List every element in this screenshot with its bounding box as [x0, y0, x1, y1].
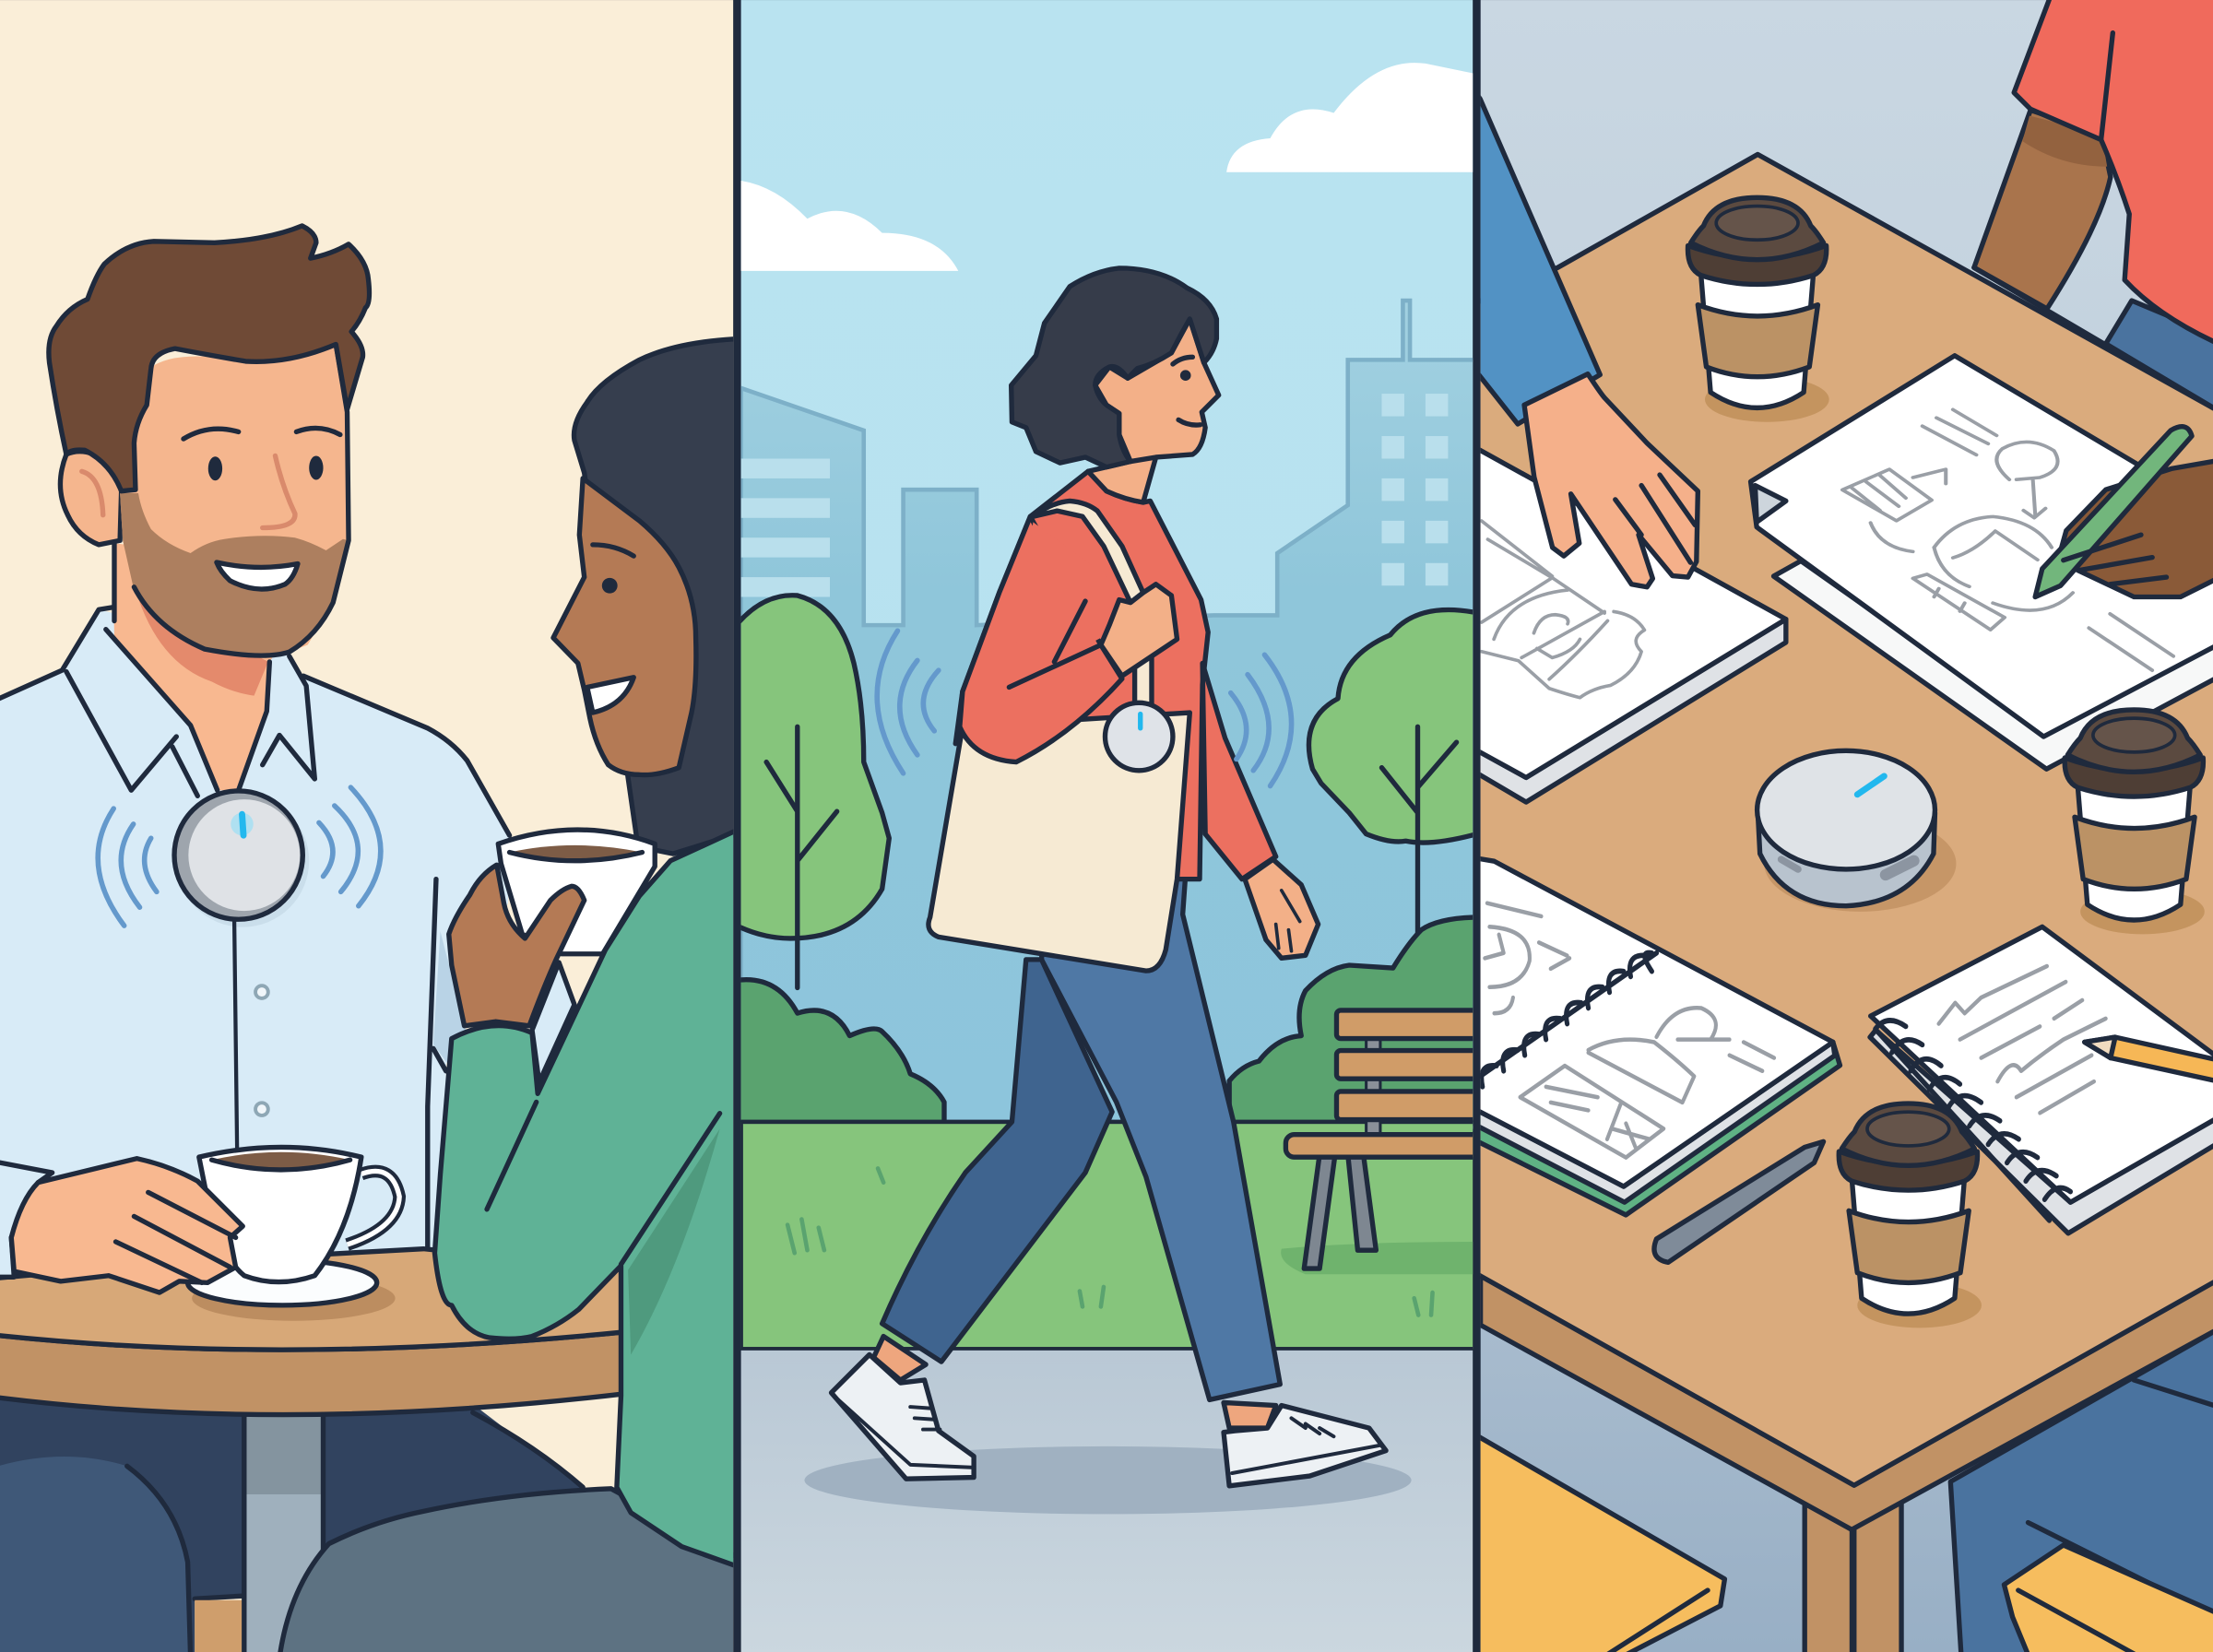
city buildings: [741, 301, 1479, 1129]
cup right: [2065, 710, 2205, 934]
table edge: [0, 1332, 624, 1415]
sound waves left: [98, 808, 157, 926]
bush right: [1229, 917, 1482, 1123]
drawing hand: [2035, 427, 2213, 597]
woman's smile: [1178, 419, 1201, 425]
neck and collar lines: [66, 540, 314, 796]
chair right: [2004, 1545, 2213, 1652]
bush left: [734, 980, 944, 1123]
arm shadow: [433, 931, 466, 1066]
man's nose: [263, 455, 295, 528]
woman's hair: [574, 338, 741, 854]
person's legs right: [1950, 1327, 2213, 1652]
person top right arm: [1974, 110, 2111, 309]
tree left: [734, 596, 889, 987]
small device on bag: [1105, 702, 1173, 771]
woman's face: [1095, 319, 1219, 462]
woman's eye: [1180, 370, 1191, 381]
person top right shirt: [2014, 0, 2213, 346]
man's smile: [217, 562, 298, 589]
man's eyebrows: [183, 428, 340, 439]
woman's coffee cup: [498, 830, 655, 954]
grass tufts: [787, 1168, 1433, 1316]
grass: [741, 1122, 1478, 1349]
man's eyes: [208, 455, 324, 480]
man's hand: [11, 1159, 243, 1292]
cup bottom: [1839, 1103, 1982, 1328]
cloud right: [1226, 63, 1473, 172]
road: [741, 1351, 1473, 1652]
wearable device on man: [174, 791, 309, 927]
table top: [0, 1249, 628, 1350]
woman's walking hand: [1245, 859, 1319, 958]
woman's hand: [449, 865, 585, 1026]
man's coffee cup: [199, 1147, 399, 1282]
front leg: [1042, 875, 1280, 1399]
man's shirt placket and buttons: [234, 920, 268, 1150]
ground shadow: [804, 1446, 1412, 1514]
notebook upper left: [1474, 447, 1786, 802]
man's shirt: [0, 609, 510, 1256]
man's face: [120, 345, 349, 655]
knee outline: [127, 1466, 191, 1652]
table foot block: [195, 1600, 243, 1652]
sketch paper back: [1774, 560, 2213, 769]
bench: [1281, 1010, 1485, 1274]
smart speaker device: [1757, 750, 1956, 912]
upper bag strap: [1033, 501, 1143, 603]
legs outline: [195, 1412, 583, 1599]
building windows left: [741, 459, 830, 597]
back leg: [882, 960, 1112, 1362]
hand gripping strap: [1101, 584, 1178, 676]
back shoe: [832, 1354, 974, 1479]
notebook lower right: [1870, 926, 2213, 1233]
chair left: [1473, 1434, 1724, 1652]
man's legs under table: [0, 1390, 586, 1652]
sketch paper front: [1751, 356, 2213, 737]
saucer: [188, 1260, 377, 1305]
woman's face: [553, 478, 696, 775]
face outline: [134, 345, 349, 655]
woman's lower body: [279, 1489, 741, 1652]
far arm sleeve: [1202, 663, 1276, 879]
woman's eyebrow: [593, 545, 633, 556]
table shadow of saucer: [192, 1286, 395, 1321]
front shoe: [1224, 1406, 1386, 1486]
shirt gap near woman's arm: [532, 962, 574, 1082]
sweater folds: [487, 1102, 720, 1264]
sound waves right: [1231, 655, 1292, 786]
notebook lower left: [1474, 858, 1840, 1215]
tree right: [1308, 609, 1482, 946]
man's beard: [120, 493, 349, 655]
table top: [1474, 155, 2213, 1485]
sky: [741, 0, 1473, 1129]
cream gap below cup: [562, 959, 599, 999]
table edge: [1481, 1276, 2213, 1529]
woman's eye: [602, 578, 618, 594]
table leg: [244, 1397, 324, 1652]
woman's neck: [1088, 431, 1156, 502]
coral sweater: [955, 471, 1208, 879]
front ankle: [1224, 1402, 1276, 1428]
panel: park walk: [734, 0, 1485, 1652]
woman's hair: [1012, 268, 1216, 467]
arm fill over torso: [1011, 522, 1129, 686]
panel: table top collaboration: [1473, 0, 2213, 1652]
person top right jeans: [2106, 301, 2213, 414]
yellow pencil: [2085, 1037, 2213, 1082]
woman's green sweater: [434, 829, 741, 1568]
neck shadow: [138, 600, 267, 696]
table legs: [1805, 1496, 1901, 1652]
man's neck: [114, 544, 273, 791]
sound waves right: [319, 787, 381, 906]
grey pen: [1654, 1141, 1824, 1262]
man's ear: [60, 452, 122, 545]
man's hair: [49, 226, 370, 491]
woman's eyebrow: [1173, 357, 1192, 364]
left arm blue sleeve: [1474, 92, 1600, 424]
shirt outlines: [0, 607, 510, 1249]
cloud left: [741, 181, 958, 271]
cup top: [1687, 197, 1829, 422]
leg crease right: [2028, 1380, 2213, 1620]
tote bag: [929, 713, 1189, 971]
panel: cafe conversation: [0, 0, 741, 1652]
hand on notebook: [1524, 374, 1698, 587]
back ankle: [873, 1337, 926, 1380]
building windows right: [1381, 394, 1448, 585]
lower bag strap: [1135, 642, 1152, 713]
floor background: [1481, 0, 2213, 1652]
table shadow line: [1974, 267, 2213, 414]
sweater shade: [628, 1129, 720, 1354]
woman's smile: [587, 678, 633, 713]
man's knee: [0, 1457, 191, 1652]
cafe wall background: [0, 0, 734, 1652]
man's sleeve cuff: [0, 1162, 53, 1277]
arm crease: [1009, 601, 1101, 687]
woman's bent arm: [960, 516, 1122, 762]
sound waves left: [877, 631, 939, 773]
ear detail: [82, 471, 103, 515]
